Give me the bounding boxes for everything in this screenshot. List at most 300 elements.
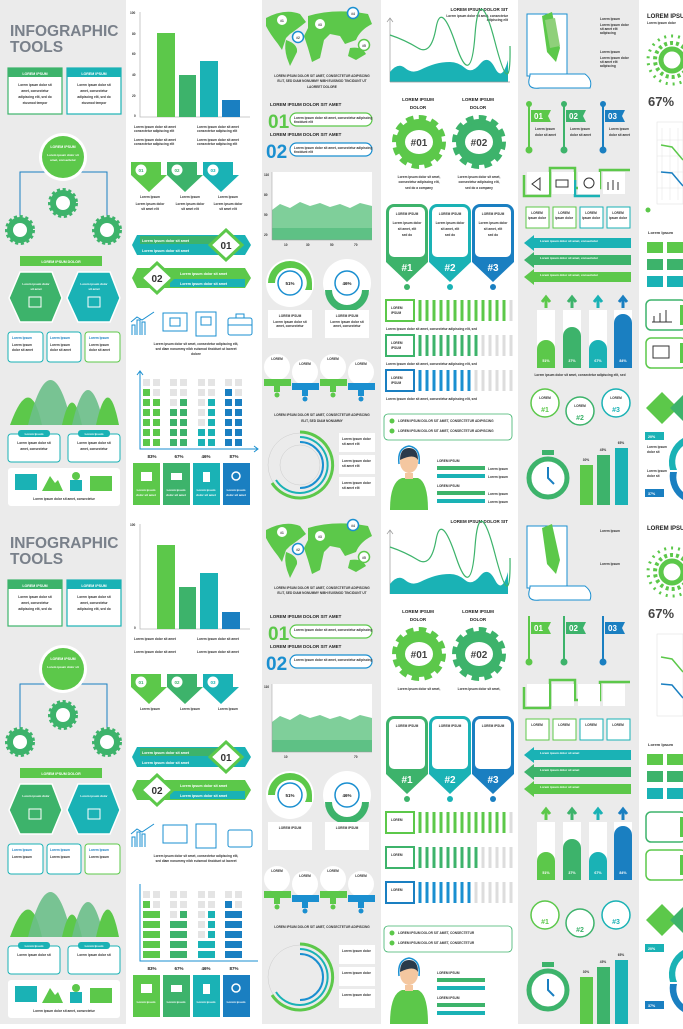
- three small boxes: Lorem Ipsum: [12, 336, 32, 340]
- document repeat: [527, 524, 620, 600]
- two text boxes: amet, consectetur: [20, 447, 48, 451]
- ribbon 01: [132, 230, 251, 260]
- person with bars: Lorem ipsum: [488, 492, 508, 496]
- striped progress bars: IPSUM: [391, 311, 401, 315]
- column 6 repeat: [645, 526, 683, 1012]
- info boxes repeat: Lorem ipsum dolor sit: [77, 595, 112, 599]
- two info boxes: adipiscing elit, sed do: [18, 95, 52, 99]
- square chart: 87%: [229, 454, 239, 459]
- document and pen: sit amet elit: [600, 27, 618, 31]
- colored tiles: Lorem ipsum: [197, 488, 216, 492]
- progress bars repeat: LOREM: [391, 818, 403, 822]
- gear diagram: LOREM IPSUM: [50, 145, 76, 149]
- icon steps repeat: [524, 680, 630, 740]
- arrow badges repeat: 01: [138, 680, 144, 685]
- rounded bar chart with arrows: 37%: [568, 359, 576, 363]
- colored tiles: [133, 463, 250, 505]
- icon row: sed diam nonummy nibh euismod tincidunt ut laoreet: [155, 347, 237, 351]
- title repeat: TOOLS: [10, 551, 63, 568]
- icon row: Lorem ipsum dolor sit amet, consectetur adipiscing elit,: [154, 342, 238, 346]
- stopwatch repeat: [529, 953, 628, 1024]
- numbered list repeat: 02: [266, 654, 287, 675]
- pentagon markers: sed do: [402, 233, 412, 237]
- rounded bar chart with arrows: Lorem ipsum dolor sit amet, consectetur adipiscing elit, sed: [534, 373, 626, 377]
- area chart repeat: 110: [264, 685, 269, 689]
- callouts repeat: LOREM: [271, 869, 283, 873]
- column 1: [7, 23, 121, 506]
- hexagons repeat: [9, 784, 120, 834]
- arrow badges: Lorem Ipsum: [180, 195, 200, 199]
- stopwatch repeat: 45%: [600, 960, 606, 964]
- gears repeat: #01: [411, 650, 428, 661]
- title repeat: INFOGRAPHIC: [10, 535, 118, 552]
- pentagon markers repeat: LOREM IPSUM: [482, 724, 505, 728]
- rounded bars repeat: 51%: [542, 871, 550, 875]
- stopwatch and bars: [529, 441, 628, 505]
- ring title repeat: 67%: [648, 606, 674, 621]
- hexagons: sit amet: [30, 287, 42, 291]
- stopwatch and bars: 30%: [583, 458, 589, 462]
- stopwatch repeat: 30%: [583, 970, 589, 974]
- progress bars repeat: LOREM: [391, 888, 403, 892]
- checklist pill: [384, 414, 512, 440]
- arrow badges: sit amet elit: [219, 207, 238, 211]
- two text boxes: Lorem Ipsum: [25, 432, 44, 436]
- radar chart: sit amet elit: [342, 486, 360, 490]
- pentagon markers: Lorem ipsum dolor: [393, 221, 422, 225]
- gears: sed do a company: [465, 186, 493, 190]
- colored tiles: Lorem ipsum: [227, 488, 246, 492]
- person repeat: [390, 958, 485, 1024]
- gears: Lorem ipsum dolor sit amet,: [398, 175, 440, 179]
- gears repeat: DOLOR: [470, 617, 487, 622]
- donuts: Lorem ipsum dolor sit: [330, 320, 365, 324]
- striped progress bars: LOREM: [391, 376, 403, 380]
- bar chart: [130, 11, 250, 146]
- square chart repeat: 46%: [201, 966, 211, 971]
- map caption: [274, 74, 370, 89]
- square chart: 67%: [174, 454, 184, 459]
- two text boxes: Lorem ipsum dolor sit: [77, 441, 112, 445]
- info boxes repeat: adipiscing elit, sed do: [18, 607, 52, 611]
- line chart: [646, 122, 683, 212]
- numbered list: 01: [268, 112, 290, 133]
- square chart: 46%: [201, 454, 211, 459]
- three small boxes: dolor sit amet: [50, 348, 72, 352]
- gear diagram: [7, 133, 120, 243]
- arrow badges: sit amet elit: [141, 207, 160, 211]
- progress bars repeat: [386, 812, 511, 903]
- circle badges repeat: #2: [576, 927, 584, 934]
- donuts: LOREM IPSUM: [279, 314, 302, 318]
- small boxes repeat: Lorem Ipsum: [50, 848, 70, 852]
- document and pen: adipiscing: [600, 64, 616, 68]
- circle badges: #1: [541, 407, 549, 414]
- three small boxes: dolor sit amet: [89, 348, 111, 352]
- document repeat: Lorem Ipsum: [600, 529, 620, 533]
- ring of dots title: [647, 14, 683, 109]
- gears: consectetur adipiscing elit,: [398, 180, 440, 184]
- pentagon markers: sed do: [445, 233, 455, 237]
- wave chart repeat: [387, 519, 510, 594]
- radar chart repeat: [268, 925, 375, 1010]
- arrows repeat: Lorem ipsum dolor sit amet: [540, 785, 579, 789]
- gears repeat: LOREM IPSUM: [402, 609, 434, 614]
- gear diagram repeat: LOREM IPSUM: [50, 657, 76, 661]
- callouts repeat: LOREM: [327, 869, 339, 873]
- two text boxes: Lorem ipsum dolor sit: [17, 441, 52, 445]
- bar chart: consectetur adipiscing elit: [134, 129, 175, 133]
- ring of dots title: 67%: [648, 94, 674, 109]
- colored tiles repeat: Lorem ipsum: [137, 1000, 156, 1004]
- world map: #3: [318, 23, 322, 27]
- striped progress bars: IPSUM: [391, 346, 401, 350]
- banner: LOREM IPSUM DOLOR: [41, 260, 81, 264]
- radar chart repeat: Lorem ipsum dolor: [342, 949, 372, 953]
- square chart: [137, 371, 258, 459]
- envelopes repeat: Lorem Ipsum: [648, 742, 674, 747]
- gears: DOLOR: [410, 105, 427, 110]
- timeline repeat: 02: [569, 624, 578, 633]
- icon step row: ipsum dolor: [609, 216, 628, 220]
- rounded bar chart with arrows: 51%: [542, 359, 550, 363]
- circle badges repeat: #1: [541, 919, 549, 926]
- colored tiles: dolor sit amet: [136, 493, 156, 497]
- striped progress bars: Lorem ipsum dolor sit amet, consectetur adipiscing elit, sed: [386, 397, 477, 401]
- donuts repeat: 51%: [285, 793, 295, 798]
- wave chart repeat: LOREM IPSUM DOLOR SIT: [450, 519, 508, 524]
- numbered list: tincidunt elit: [294, 150, 314, 154]
- gears: #02: [471, 138, 488, 149]
- document and pen: Lorem Ipsum: [600, 17, 620, 21]
- bar chart repeat: Lorem ipsum dolor sit amet: [197, 650, 240, 654]
- square chart repeat: 87%: [229, 966, 239, 971]
- three small boxes: [8, 332, 120, 362]
- icon steps repeat: LOREM: [585, 723, 597, 727]
- envelopes: [647, 230, 683, 287]
- striped progress bars: LOREM: [391, 306, 403, 310]
- donuts: Lorem ipsum dolor sit: [273, 320, 308, 324]
- gear diagram: Lorem ipsum dolor sit: [47, 153, 79, 157]
- colored tiles: dolor sit amet: [166, 493, 186, 497]
- area chart: 70: [354, 243, 358, 247]
- area chart repeat: 10: [284, 755, 288, 759]
- world map repeat: #2: [296, 548, 300, 552]
- mountain chart: [10, 380, 119, 425]
- wave chart: LOREM IPSUM DOLOR SIT: [450, 7, 508, 12]
- vertical timeline labels: [526, 101, 631, 154]
- envelopes repeat: [647, 742, 683, 799]
- small boxes repeat: Lorem ipsum: [12, 855, 32, 859]
- stopwatch and bars: 65%: [618, 441, 624, 445]
- world map repeat: #4: [351, 524, 355, 528]
- two info boxes: LOREM IPSUM: [81, 72, 107, 76]
- ring chart: 20%: [648, 435, 656, 439]
- bar chart: Lorem ipsum dolor sit amet: [134, 138, 177, 142]
- donuts repeat: [266, 771, 371, 850]
- colored tiles repeat: Lorem ipsum: [197, 1000, 216, 1004]
- icon row: dolore: [191, 352, 201, 356]
- area chart: 50: [264, 213, 268, 217]
- colored tiles: Lorem ipsum: [137, 488, 156, 492]
- text boxes repeat: [8, 942, 120, 974]
- area chart: 50: [330, 243, 334, 247]
- world map: #4: [351, 12, 355, 16]
- callouts: [264, 354, 375, 402]
- info boxes repeat: adipiscing elit, sed do: [77, 607, 111, 611]
- pentagon markers: sit amet, elit: [398, 227, 417, 231]
- info boxes repeat: LOREM IPSUM: [22, 584, 48, 588]
- map caption: ELIT, SED DIAM NONUMMY NIBH EUISMOD TINCIDUNT UT: [277, 79, 367, 83]
- arrows repeat: [524, 747, 631, 797]
- gears: LOREM IPSUM: [462, 97, 494, 102]
- bar chart repeat: 100: [130, 523, 136, 527]
- text boxes repeat: Lorem Ipsum: [85, 944, 104, 948]
- icon steps repeat: LOREM: [558, 723, 570, 727]
- column 6 partial: [645, 14, 683, 500]
- two info boxes: adipiscing elit, sed do: [77, 95, 111, 99]
- person with bars: Lorem ipsum: [488, 467, 508, 471]
- column 3 repeat: [264, 520, 375, 1010]
- hexagons: [9, 272, 120, 322]
- line chart repeat: [657, 634, 683, 716]
- hexagons: Lorem ipsum dolor: [22, 282, 50, 286]
- ring chart: 37%: [648, 492, 656, 496]
- title repeat: [10, 535, 118, 568]
- vertical timeline labels: dolor sit amet: [535, 133, 557, 137]
- gears repeat: [396, 609, 502, 691]
- ribbon 01 repeat: Lorem ipsum dolor sit amet: [142, 751, 190, 755]
- numbered list: [266, 102, 372, 163]
- circle badges repeat: #3: [612, 919, 620, 926]
- colored tiles repeat: Lorem ipsum: [227, 1000, 246, 1004]
- banner repeat: LOREM IPSUM DOLOR: [41, 772, 81, 776]
- bar chart: consectetur adipiscing elit: [197, 142, 238, 146]
- icon row repeat: Lorem ipsum dolor sit amet, consectetur: [33, 1009, 96, 1013]
- column 5 repeat: [524, 524, 632, 1024]
- person repeat: LOREM IPSUM: [437, 996, 460, 1000]
- pentagon markers: LOREM IPSUM: [482, 212, 505, 216]
- pentagon markers: sed do: [488, 233, 498, 237]
- icon row repeat: sed diam nonummy nibh euismod tincidunt ut laoreet: [155, 859, 237, 863]
- document and pen: sit amet elit: [600, 60, 618, 64]
- bar chart repeat: 0: [134, 626, 136, 630]
- pentagon markers: sit amet, elit: [441, 227, 460, 231]
- diamonds: [646, 392, 683, 424]
- arrows repeat: Lorem ipsum dolor sit amet: [540, 751, 579, 755]
- gears: #01: [411, 138, 428, 149]
- circle badges: LOREM: [610, 396, 622, 400]
- numbered list: tincidunt elit: [294, 120, 314, 124]
- arrow badges: 01: [138, 168, 144, 173]
- world map: [266, 8, 372, 66]
- callouts repeat: LOREM: [355, 874, 367, 878]
- world map repeat: #3: [318, 535, 322, 539]
- vertical timeline labels: 03: [608, 112, 617, 121]
- left arrows: Lorem ipsum dolor sit amet, consectetur: [540, 256, 599, 260]
- rounded bar chart with arrows: [534, 297, 632, 377]
- ribbon 02: Lorem ipsum dolor sit amet: [180, 282, 228, 286]
- ribbon 02 repeat: 02: [151, 786, 163, 797]
- pentagon markers: Lorem ipsum dolor: [479, 221, 508, 225]
- bar chart: 60: [132, 52, 136, 56]
- bar chart repeat: Lorem ipsum dolor sit amet: [134, 637, 177, 641]
- person repeat: LOREM IPSUM: [437, 971, 460, 975]
- bar chart repeat: [130, 523, 250, 654]
- striped progress bars: Lorem ipsum dolor sit amet, consectetur adipiscing elit, sed: [386, 362, 477, 366]
- timeline repeat: [526, 616, 625, 666]
- donuts: 51%: [285, 281, 295, 286]
- ribbon 02: Lorem ipsum dolor sit amet: [180, 272, 228, 276]
- ring chart: Lorem ipsum: [647, 445, 667, 449]
- gears: consectetur adipiscing elit,: [458, 180, 500, 184]
- donuts repeat: 46%: [342, 793, 352, 798]
- top half infographic: [0, 0, 683, 512]
- world map: #5: [362, 44, 366, 48]
- bar chart: consectetur adipiscing elit: [197, 129, 238, 133]
- arrow badges: Lorem Ipsum: [218, 195, 238, 199]
- area chart repeat: [264, 684, 372, 759]
- gears: sed do a company: [405, 186, 433, 190]
- donuts repeat: LOREM IPSUM: [336, 826, 359, 830]
- gears repeat: Lorem ipsum dolor sit amet,: [458, 687, 500, 691]
- circle badges: [531, 389, 630, 425]
- two text boxes: [8, 430, 120, 462]
- radar chart: LOREM IPSUM DOLOR SIT AMET, CONSECTETUR ADIPISCING: [274, 413, 370, 417]
- ring title repeat: [647, 526, 683, 621]
- document repeat: Lorem Ipsum: [600, 562, 620, 566]
- three small boxes: Lorem Ipsum: [50, 336, 70, 340]
- person with bars: Lorem ipsum: [488, 500, 508, 504]
- gears repeat: LOREM IPSUM: [462, 609, 494, 614]
- gear diagram repeat: Lorem ipsum dolor sit: [47, 665, 79, 669]
- hexagons: Lorem ipsum dolor: [80, 282, 108, 286]
- pentagon markers repeat: LOREM IPSUM: [439, 724, 462, 728]
- two info boxes: Lorem ipsum dolor sit: [18, 83, 53, 87]
- ribbon 02 repeat: Lorem ipsum dolor sit amet: [180, 784, 228, 788]
- map caption: LOREM IPSUM DOLOR SIT AMET, CONSECTETUR ADIPISCING: [274, 74, 370, 78]
- numbered list: LOREM IPSUM DOLOR SIT AMET: [270, 102, 342, 107]
- world map repeat: #1: [280, 531, 284, 535]
- numbered list: LOREM IPSUM DOLOR SIT AMET: [270, 132, 342, 137]
- radar chart: sit amet elit: [342, 464, 360, 468]
- bar chart: 40: [132, 73, 136, 77]
- column 3: [264, 8, 375, 498]
- striped progress bars: LOREM: [391, 341, 403, 345]
- three small boxes: Lorem ipsum: [89, 343, 109, 347]
- colored tiles: Lorem ipsum: [167, 488, 186, 492]
- two info boxes: eiusmod tempor: [23, 101, 48, 105]
- document and pen: adipiscing: [600, 31, 616, 35]
- numbered list repeat: Lorem ipsum dolor sit amet, consectetur adipiscing: [294, 628, 372, 632]
- document and pen: Lorem Ipsum: [600, 50, 620, 54]
- column 5: [524, 12, 632, 505]
- three small boxes: Lorem Ipsum: [89, 336, 109, 340]
- ribbon 01: 01: [220, 241, 232, 252]
- area chart: 20: [264, 233, 268, 237]
- ring chart repeat: [645, 944, 683, 1012]
- timeline repeat: 01: [534, 624, 543, 633]
- bottom half infographic (repeat): [0, 512, 683, 1024]
- arrow badges: [131, 162, 243, 211]
- ring chart repeat: 37%: [648, 1004, 656, 1008]
- gears: Lorem ipsum dolor sit amet,: [458, 175, 500, 179]
- numbered list repeat: 01: [268, 624, 290, 645]
- two info boxes: Lorem ipsum dolor sit: [77, 83, 112, 87]
- numbered list repeat: Lorem ipsum dolor sit amet, consectetur adipiscing: [294, 658, 372, 662]
- small boxes repeat: [8, 844, 120, 874]
- document and pen: [527, 12, 630, 88]
- two text boxes: Lorem Ipsum: [85, 432, 104, 436]
- donuts repeat: LOREM IPSUM: [279, 826, 302, 830]
- icon row: [8, 468, 120, 506]
- arrow badges: 03: [210, 168, 216, 173]
- pentagon markers: LOREM IPSUM: [439, 212, 462, 216]
- circle badges: LOREM: [539, 396, 551, 400]
- icon row: [131, 312, 252, 356]
- area chart repeat: 70: [354, 755, 358, 759]
- world map: #1: [280, 19, 284, 23]
- checklist pill: LOREM IPSUM DOLOR SIT AMET, CONSECTETUR ADIPISCING: [398, 429, 494, 433]
- area chart: 30: [306, 243, 310, 247]
- checklist repeat: [384, 926, 512, 952]
- text boxes repeat: Lorem ipsum dolor sit: [77, 953, 112, 957]
- ring chart: Lorem ipsum: [647, 469, 667, 473]
- icon step row: ipsum dolor: [582, 216, 601, 220]
- bar chart: 100: [130, 11, 136, 15]
- hexagons repeat: Lorem ipsum dolor: [22, 794, 50, 798]
- column 4: [384, 7, 514, 510]
- wave chart: adipiscing elit: [487, 18, 509, 22]
- bar chart: Lorem ipsum dolor sit amet: [134, 125, 177, 129]
- left arrows: [524, 235, 631, 285]
- checklist pill: LOREM IPSUM DOLOR SIT AMET, CONSECTETUR ADIPISCING: [398, 419, 494, 423]
- numbered list: Lorem ipsum dolor sit amet, consectetur adipiscing: [294, 116, 372, 120]
- map caption repeat: LOREM IPSUM DOLOR SIT AMET, CONSECTETUR ADIPISCING: [274, 586, 370, 590]
- ring chart repeat: 20%: [648, 947, 656, 951]
- arrow badges: Lorem Ipsum: [140, 195, 160, 199]
- icon step row: LOREM: [612, 211, 624, 215]
- ring chart: [645, 432, 683, 500]
- wave chart: Lorem ipsum dolor sit amet, consectetur: [446, 14, 509, 18]
- vertical timeline labels: Lorem ipsum: [535, 127, 555, 131]
- small boxes repeat: Lorem Ipsum: [12, 848, 32, 852]
- column 1 repeat: [7, 535, 121, 1018]
- ring chart: dolor sit: [647, 450, 661, 454]
- rounded bars repeat: 37%: [568, 871, 576, 875]
- info boxes repeat: amet, consectetur: [21, 601, 49, 605]
- bar chart repeat: Lorem ipsum dolor sit amet: [134, 650, 177, 654]
- radar chart: [268, 413, 375, 498]
- document and pen: Lorem ipsum dolor: [600, 23, 630, 27]
- pentagon markers: #3: [487, 263, 499, 274]
- hexagons: sit amet: [88, 287, 100, 291]
- world map repeat: [266, 520, 372, 578]
- numbered list repeat: [266, 614, 372, 675]
- striped progress bars: IPSUM: [391, 381, 401, 385]
- column 2 repeat: [130, 523, 258, 1017]
- person with bars: LOREM IPSUM: [437, 459, 460, 463]
- two info boxes: [8, 68, 121, 114]
- donuts: 46%: [342, 281, 352, 286]
- radar chart: Lorem ipsum dolor: [342, 459, 372, 463]
- icon row repeat: [8, 980, 120, 1018]
- pentagon markers: LOREM IPSUM: [396, 212, 419, 216]
- arrow badges repeat: Lorem Ipsum: [140, 707, 160, 711]
- gears: [396, 97, 502, 190]
- rounded bars repeat: 84%: [619, 871, 627, 875]
- info boxes repeat: amet, consectetur: [80, 601, 108, 605]
